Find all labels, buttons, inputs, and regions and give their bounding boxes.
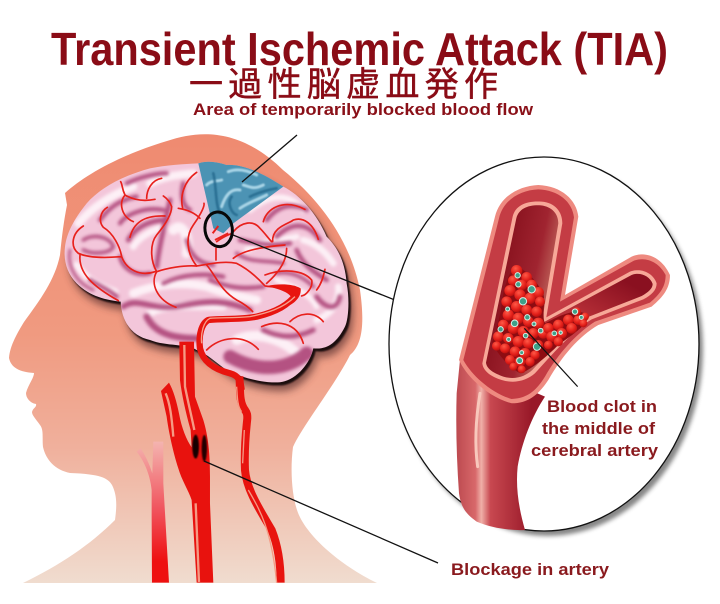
brain [60,157,353,391]
brain soft shadow [69,170,353,391]
Japanese title: 一過性脳虚血発作 [189,66,498,104]
heading: area of blocked flow: Area of temporarily blocked blood flow [193,100,534,119]
title: Transient Ischemic Attack (TIA) [51,23,668,75]
head silhouette [9,134,377,583]
label: blood clot: the middle of [542,419,655,438]
clot: green platelets [498,273,583,364]
pointer line: blockage [204,461,438,563]
vessel lumen [486,205,653,378]
vessel highlight [476,393,480,467]
cerebral arteries [73,172,325,350]
vessel tube [456,360,545,530]
blockage [192,435,207,462]
clot: red cells [492,265,589,373]
carotid highlights [166,345,199,582]
blockage circle [203,210,235,248]
label: blockage in artery: Blockage in artery [451,560,610,579]
lower artery [239,377,281,583]
brain dark edge [67,165,351,385]
branch lumen [542,274,653,348]
label: blood clot: Blood clot in [547,397,657,416]
inset circle [389,157,703,536]
pointer line: blocked area [242,135,297,182]
label: blood clot: cerebral artery [531,441,659,460]
vessel inner rim [482,202,657,382]
gyri highlights [77,173,339,353]
brain body [60,157,353,390]
vessel wall [463,189,666,399]
label: blood clot [531,397,659,460]
pointer line: circle to inset [233,235,452,323]
carotid main [161,342,213,583]
blue infarct wedge [198,162,283,233]
clot backing [492,266,588,373]
vessel outer rim [459,185,670,403]
pale far artery [137,442,169,583]
carotid arteries [161,342,281,583]
artery cross-section with clot [456,185,670,530]
pointer line: clot [524,328,578,387]
middle cerebral artery trunk [200,294,297,390]
gyri shading [69,173,340,367]
artery bulb [267,284,301,305]
artery highlight [201,297,295,343]
